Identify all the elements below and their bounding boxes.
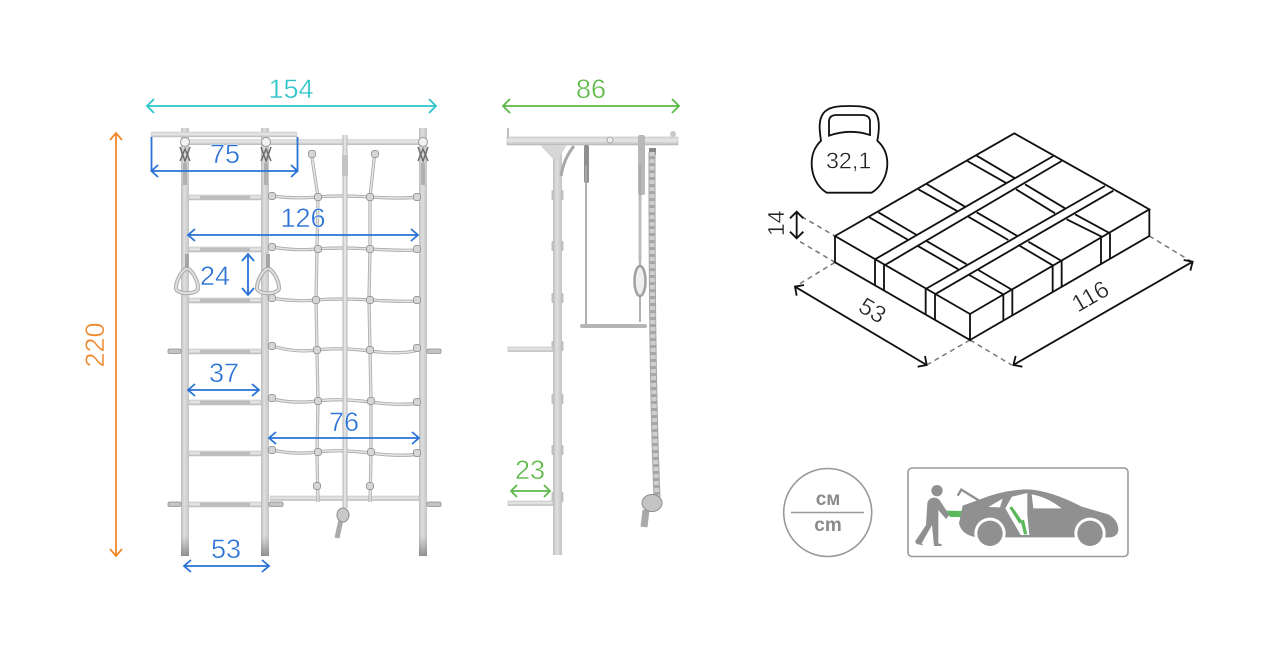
dimension: 126: 126	[280, 203, 326, 233]
climbing rope	[642, 152, 662, 527]
strapped box	[835, 133, 1149, 340]
ladder rungs	[189, 195, 419, 507]
dimension: 37: 37	[209, 358, 239, 388]
dimension: box length 116	[1013, 260, 1193, 367]
dimension: 53	[184, 534, 269, 572]
dimension: total width 154: 154	[268, 74, 314, 104]
climbing net	[272, 135, 419, 538]
front view of wall bars with net	[151, 128, 441, 556]
dimension: total width 154	[147, 74, 436, 113]
side ring	[634, 266, 646, 296]
side top bar	[507, 128, 678, 195]
dimension: box height 14	[763, 210, 803, 238]
dimension: 76: 76	[329, 407, 359, 437]
icon: kettlebell weight 32,1: 32,1	[826, 148, 871, 174]
side clamps	[552, 190, 564, 502]
dimension: arm 23: 23	[515, 455, 545, 485]
units badge	[784, 468, 872, 556]
dimension: height 220	[80, 133, 122, 556]
dimension: depth 86: 86	[576, 74, 606, 104]
icon: green package in trunk	[947, 511, 963, 517]
front view uprights	[181, 128, 427, 556]
package diagram	[763, 106, 1193, 367]
dimension: rung pitch 24	[200, 254, 254, 295]
dimension: arm 23	[511, 455, 550, 497]
guide dashes	[795, 217, 1192, 365]
gymnastic rings	[176, 254, 279, 293]
dimension: height 220: 220	[80, 322, 110, 368]
swing	[580, 165, 647, 328]
dimension: box height 14: 14	[763, 210, 789, 236]
icon: kettlebell weight 32,1	[812, 106, 887, 193]
icon: car	[958, 489, 1118, 549]
dimension: 76	[269, 407, 419, 444]
dimension: bar width 75	[152, 137, 298, 177]
net knots	[268, 150, 420, 522]
units badge: cm	[814, 515, 842, 536]
dimension: rung pitch 24: 24	[200, 261, 230, 291]
car loading panel	[908, 468, 1128, 556]
dimension: box width 53	[795, 285, 927, 367]
dimension: 126	[188, 203, 418, 241]
wall brackets	[168, 349, 441, 506]
dimension: 37	[188, 358, 259, 396]
icon: person carrying	[915, 485, 949, 546]
side wall arms	[508, 347, 553, 506]
side upright	[553, 140, 562, 555]
dimension: box width 53: 53	[854, 292, 891, 329]
dimension: box length 116: 116	[1067, 276, 1114, 318]
front view top bars	[151, 132, 428, 185]
dimension: bar width 75: 75	[210, 139, 240, 169]
side view of wall bars	[507, 128, 678, 555]
dimension: depth 86	[503, 74, 679, 113]
dimension: 53: 53	[211, 534, 241, 564]
units badge: см	[816, 489, 840, 510]
